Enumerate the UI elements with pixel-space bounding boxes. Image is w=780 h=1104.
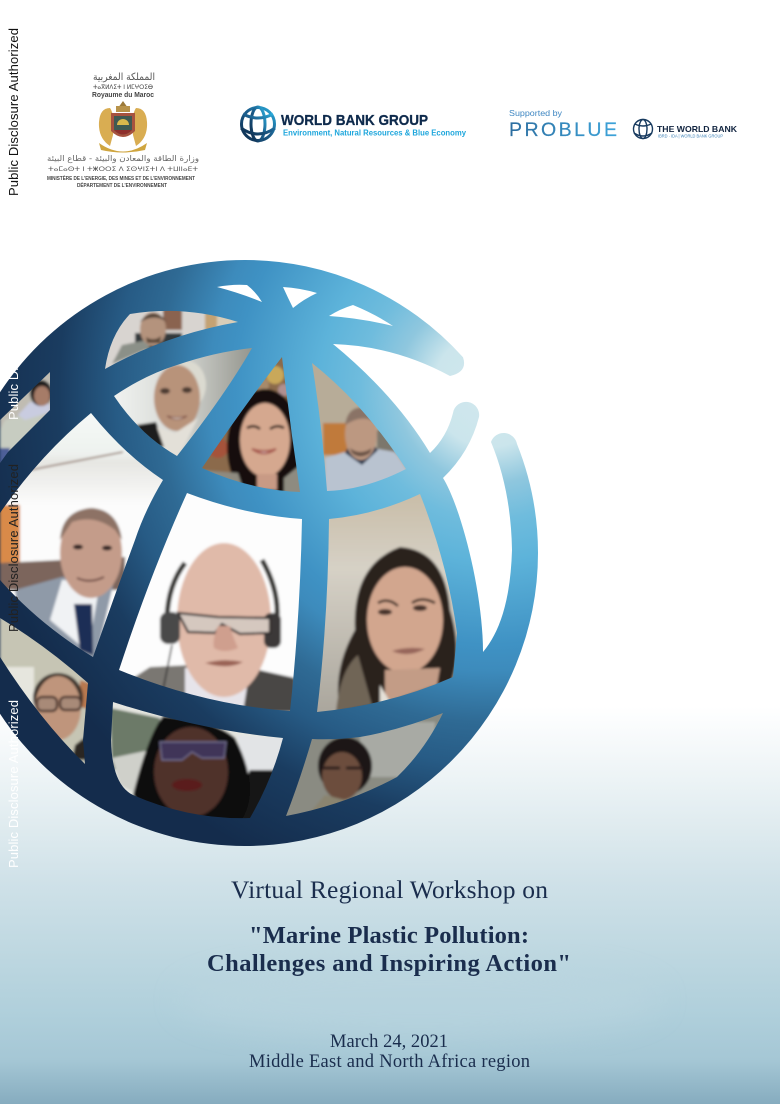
stamp: public disclosure top: Public Disclosure Authorized	[6, 28, 21, 196]
French kingdom name: Royaume du Maroc	[92, 92, 154, 99]
department line: Environment, Natural Resources & Blue Economy	[283, 128, 466, 138]
stamp: public disclosure second: Public Disclosure Authorized	[6, 252, 21, 420]
French department name: DÉPARTEMENT DE L'ENVIRONNEMENT	[77, 181, 167, 189]
logo: PROBLUE	[509, 109, 617, 141]
Tifinagh kingdom name: ⵜⴰⴳⵍⴷⵉⵜ ⵏ ⵍⵎⵖⵔⵉⴱ	[93, 83, 153, 91]
photo: woman at far left edge	[0, 370, 52, 465]
icon: coat of arms	[99, 101, 147, 152]
event date and region	[249, 1032, 530, 1072]
wordmark: PROBLUE	[509, 119, 617, 141]
photo: woman with dark hair and purple glasses	[108, 700, 288, 822]
photo: man with tie	[0, 410, 170, 660]
wordmark: WORLD BANK GROUP	[281, 113, 428, 129]
date: March 24, 2021	[330, 1032, 448, 1052]
logo: World Bank Group	[241, 107, 466, 141]
title: workshop intro: Virtual Regional Workshop on	[231, 875, 548, 904]
heading line 2: Challenges and Inspiring Action"	[207, 950, 571, 977]
sub line: IBRD · IDA | WORLD BANK GROUP	[658, 134, 723, 138]
logo: Kingdom of Morocco ministry	[47, 72, 199, 189]
photo: man looking down	[312, 363, 406, 491]
photo: man with headset	[115, 490, 305, 715]
wordmark: THE WORLD BANK	[657, 124, 738, 134]
photo: woman with long hair	[315, 490, 460, 715]
stamp: public disclosure third: Public Disclosure Authorized	[6, 464, 21, 632]
stamp: public disclosure fourth: Public Disclosure Authorized	[6, 700, 21, 868]
photo: man top	[105, 310, 238, 369]
Arabic ministry name: وزارة الطاقة والمعادن والبيئة - قطاع البيئة	[47, 154, 199, 163]
Arabic kingdom name: المملكة المغربية	[93, 72, 155, 83]
French ministry name: MINISTÈRE DE L'ENERGIE, DES MINES ET DE L'ENVIRONNEMENT	[47, 174, 195, 182]
photo: woman with glasses, lower left	[0, 615, 92, 770]
region: Middle East and North Africa region	[249, 1052, 530, 1072]
photo: woman with headscarf	[114, 348, 252, 456]
heading line 1: "Marine Plastic Pollution:	[249, 922, 529, 949]
photo: woman lower right	[284, 710, 446, 820]
globe with participant photos	[0, 260, 538, 846]
globe body	[0, 260, 538, 846]
icon: small globe	[241, 107, 275, 141]
title: main heading	[207, 922, 571, 977]
Tifinagh ministry name: ⵜⴰⵎⴰⵙⵜ ⵏ ⵜⵥⵔⵔⵉ ⴷ ⵉⵙⵖⵏⵉⵜⵏ ⴷ ⵜⵡⵏⵏⴰⴹⵜ	[48, 166, 198, 173]
logo: The World Bank	[634, 120, 738, 138]
supported by label: Supported by	[509, 109, 562, 118]
top white gaps	[217, 285, 393, 326]
icon: small globe	[634, 120, 652, 138]
photo: smiling woman	[202, 357, 300, 492]
